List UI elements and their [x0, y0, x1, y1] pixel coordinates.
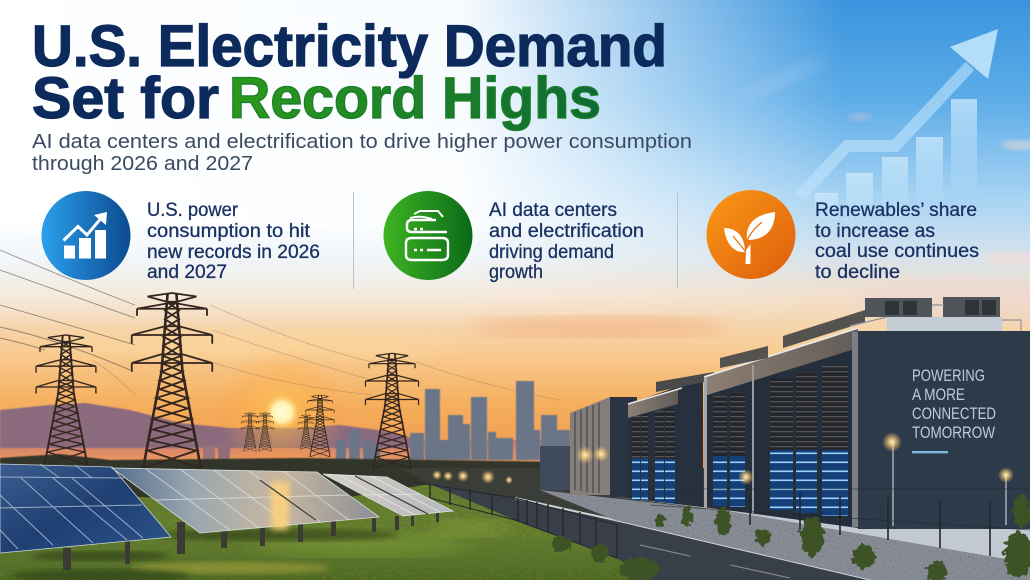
title: Record Highs: [229, 66, 601, 131]
title: U.S. Electricity Demand: [32, 14, 667, 79]
power lines: [0, 250, 135, 370]
city skyline: [203, 381, 570, 460]
text block: renewables share: [815, 200, 979, 283]
subtitle: [32, 130, 692, 175]
transmission towers: [36, 293, 419, 469]
shrubs: [552, 494, 1030, 580]
panel: dark blue solar panels: [0, 464, 171, 553]
subtitle: AI data centers and electrification to drive higher power consumption: [32, 130, 692, 153]
perimeter fences: [413, 482, 1030, 558]
text block: renewables share: Renewables’ share: [815, 200, 977, 221]
panel: main data center front: [704, 328, 858, 528]
panel: far solar panels: [323, 474, 453, 516]
faint power lines: [92, 305, 560, 400]
ground base behind site: [400, 468, 1030, 580]
icon: rising bar chart: [42, 191, 130, 280]
text block: renewables share: coal use continues: [815, 241, 979, 262]
distant mountains: [0, 403, 570, 462]
title: Set for: [32, 66, 219, 131]
small building near city: [540, 446, 570, 490]
icon: ghost rising arrow and bars: [799, 29, 998, 223]
wall slogan: CONNECTED: [912, 405, 996, 423]
panel: gravel and walkway: [540, 490, 1030, 580]
distant street lights: [432, 470, 513, 484]
text block: AI data centers: growth: [489, 262, 543, 283]
divider: [677, 192, 678, 289]
road: [425, 482, 872, 580]
panel: left data center building: [570, 397, 637, 497]
wall slogan: POWERING: [912, 367, 985, 385]
icon: leaf sprout: [706, 190, 796, 279]
divider: [353, 192, 354, 289]
distant tree line: [0, 454, 570, 500]
wall accent line: [912, 451, 948, 453]
icon: server stack: [384, 191, 472, 280]
text block: AI data centers: and electrification: [489, 221, 644, 242]
text block: power consumption: U.S. power: [147, 200, 239, 221]
rooftop cooling units: [720, 297, 1021, 368]
wall slogan: TOMORROW: [912, 424, 995, 442]
title: [32, 14, 667, 131]
text block: power consumption: new records in 2026: [147, 242, 320, 263]
text block: AI data centers: [489, 200, 644, 283]
text block: renewables share: to increase as: [815, 221, 935, 242]
lamp posts: [882, 432, 1014, 526]
text block: AI data centers: driving demand: [489, 242, 614, 263]
wall slogan: [912, 367, 996, 442]
text block: power consumption: [147, 200, 320, 283]
wall slogan: A MORE: [912, 386, 965, 404]
subtitle: through 2026 and 2027: [32, 152, 253, 175]
text block: AI data centers: AI data centers: [489, 200, 617, 221]
text block: renewables share: to decline: [815, 262, 900, 283]
panel: middle data center building: [628, 372, 714, 507]
grass field: [0, 484, 680, 580]
sun: [218, 348, 346, 476]
panel: solar array supports: [63, 512, 439, 570]
panel: building end wall: [858, 331, 1030, 529]
text block: power consumption: and 2027: [147, 262, 227, 283]
text block: power consumption: consumption to hit: [147, 221, 311, 242]
panel: reflective solar panels: [112, 468, 379, 533]
